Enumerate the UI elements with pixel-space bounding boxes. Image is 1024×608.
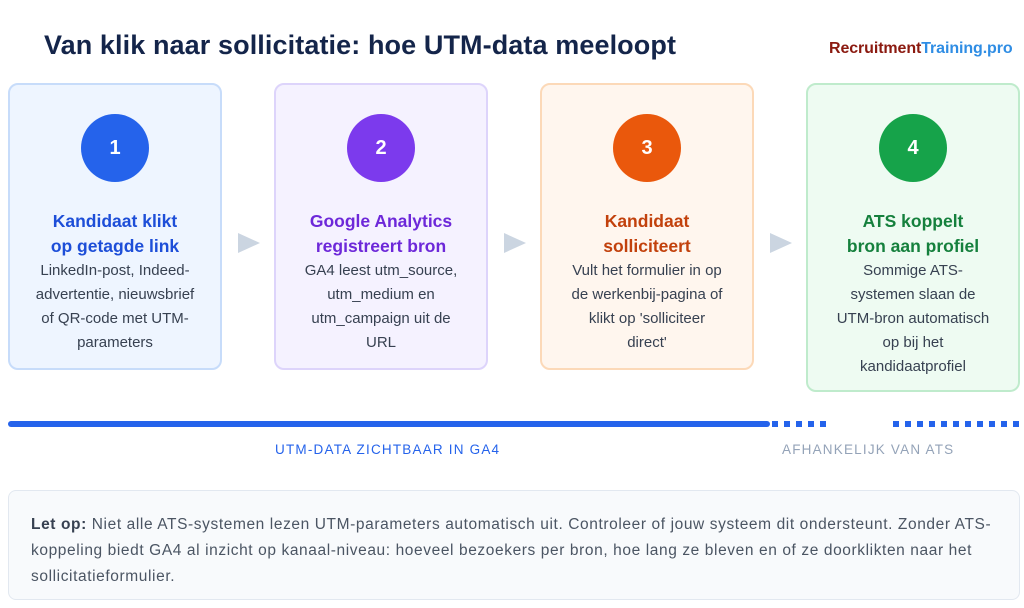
heading 4: ATS koppelt — [863, 211, 963, 231]
heading 1: op getagde link — [51, 236, 179, 256]
arrow 1 — [238, 233, 260, 253]
icon: number 4 — [879, 114, 947, 182]
heading 3: solliciteert — [603, 236, 691, 256]
heading 4 — [847, 211, 979, 256]
panel: step 4 — [806, 83, 1020, 392]
text 2: utm_campaign uit de — [311, 310, 451, 327]
logo: RecruitmentTraining.pro — [829, 40, 1013, 57]
heading 2 — [310, 211, 452, 256]
text 3 — [572, 262, 722, 351]
panel: step 2 — [274, 83, 488, 370]
arrow 2 — [504, 233, 526, 253]
text 3: direct' — [627, 334, 667, 351]
callout: note: koppeling biedt GA4 al inzicht op kanaal-niveau: hoeveel bezoekers per bron, hoe lang ze bleven en of ze doorklikten naar het — [31, 542, 972, 559]
text 4: UTM-bron automatisch — [837, 310, 989, 327]
timeline bar — [8, 421, 1019, 427]
text 4 — [837, 262, 989, 375]
text 3: klikt op 'solliciteer — [589, 310, 705, 327]
arrow 3 — [770, 233, 792, 253]
heading 3 — [603, 211, 691, 256]
icon: number 2 — [347, 114, 415, 182]
icon: number 3 — [613, 114, 681, 182]
label: GA4: UTM-DATA ZICHTBAAR IN GA4 — [275, 442, 500, 457]
text 3: de werkenbij-pagina of — [572, 286, 722, 303]
icon: number 3: 3 — [641, 137, 653, 159]
text 4: systemen slaan de — [850, 286, 976, 303]
callout: note: Let op: Niet alle ATS-systemen lezen UTM-parameters automatisch uit. Controleer of jouw systeem dit ondersteunt. Zonder ATS- — [31, 516, 991, 533]
text 2 — [305, 262, 457, 351]
text 1 — [36, 262, 194, 351]
icon: number 4: 4 — [907, 137, 919, 159]
heading 4: bron aan profiel — [847, 236, 979, 256]
heading 1 — [51, 211, 179, 256]
label: ATS: AFHANKELIJK VAN ATS — [782, 442, 954, 457]
heading 2: registreert bron — [316, 236, 446, 256]
text 1: of QR-code met UTM- — [41, 310, 189, 327]
text 2: utm_medium en — [327, 286, 435, 303]
callout: note — [8, 490, 1020, 600]
text 1: advertentie, nieuwsbrief — [36, 286, 194, 303]
text 1: LinkedIn-post, Indeed- — [40, 262, 190, 279]
text 2: URL — [366, 334, 396, 351]
heading 1: Kandidaat klikt — [53, 211, 177, 231]
text 1: parameters — [77, 334, 153, 351]
text 4: Sommige ATS- — [863, 262, 963, 279]
icon: number 2: 2 — [375, 137, 387, 159]
heading 3: Kandidaat — [605, 211, 689, 231]
title: Van klik naar sollicitatie: hoe UTM-data meeloopt — [44, 30, 676, 60]
icon: number 1 — [81, 114, 149, 182]
heading 2: Google Analytics — [310, 211, 452, 231]
panel: step 3 — [540, 83, 754, 370]
text 3: Vult het formulier in op — [572, 262, 722, 279]
text 4: op bij het — [883, 334, 943, 351]
text 4: kandidaatprofiel — [860, 358, 966, 375]
panel: step 1 — [8, 83, 222, 370]
icon: number 1: 1 — [109, 137, 121, 159]
text 2: GA4 leest utm_source, — [305, 262, 457, 279]
callout: note: sollicitatieformulier. — [31, 568, 175, 585]
